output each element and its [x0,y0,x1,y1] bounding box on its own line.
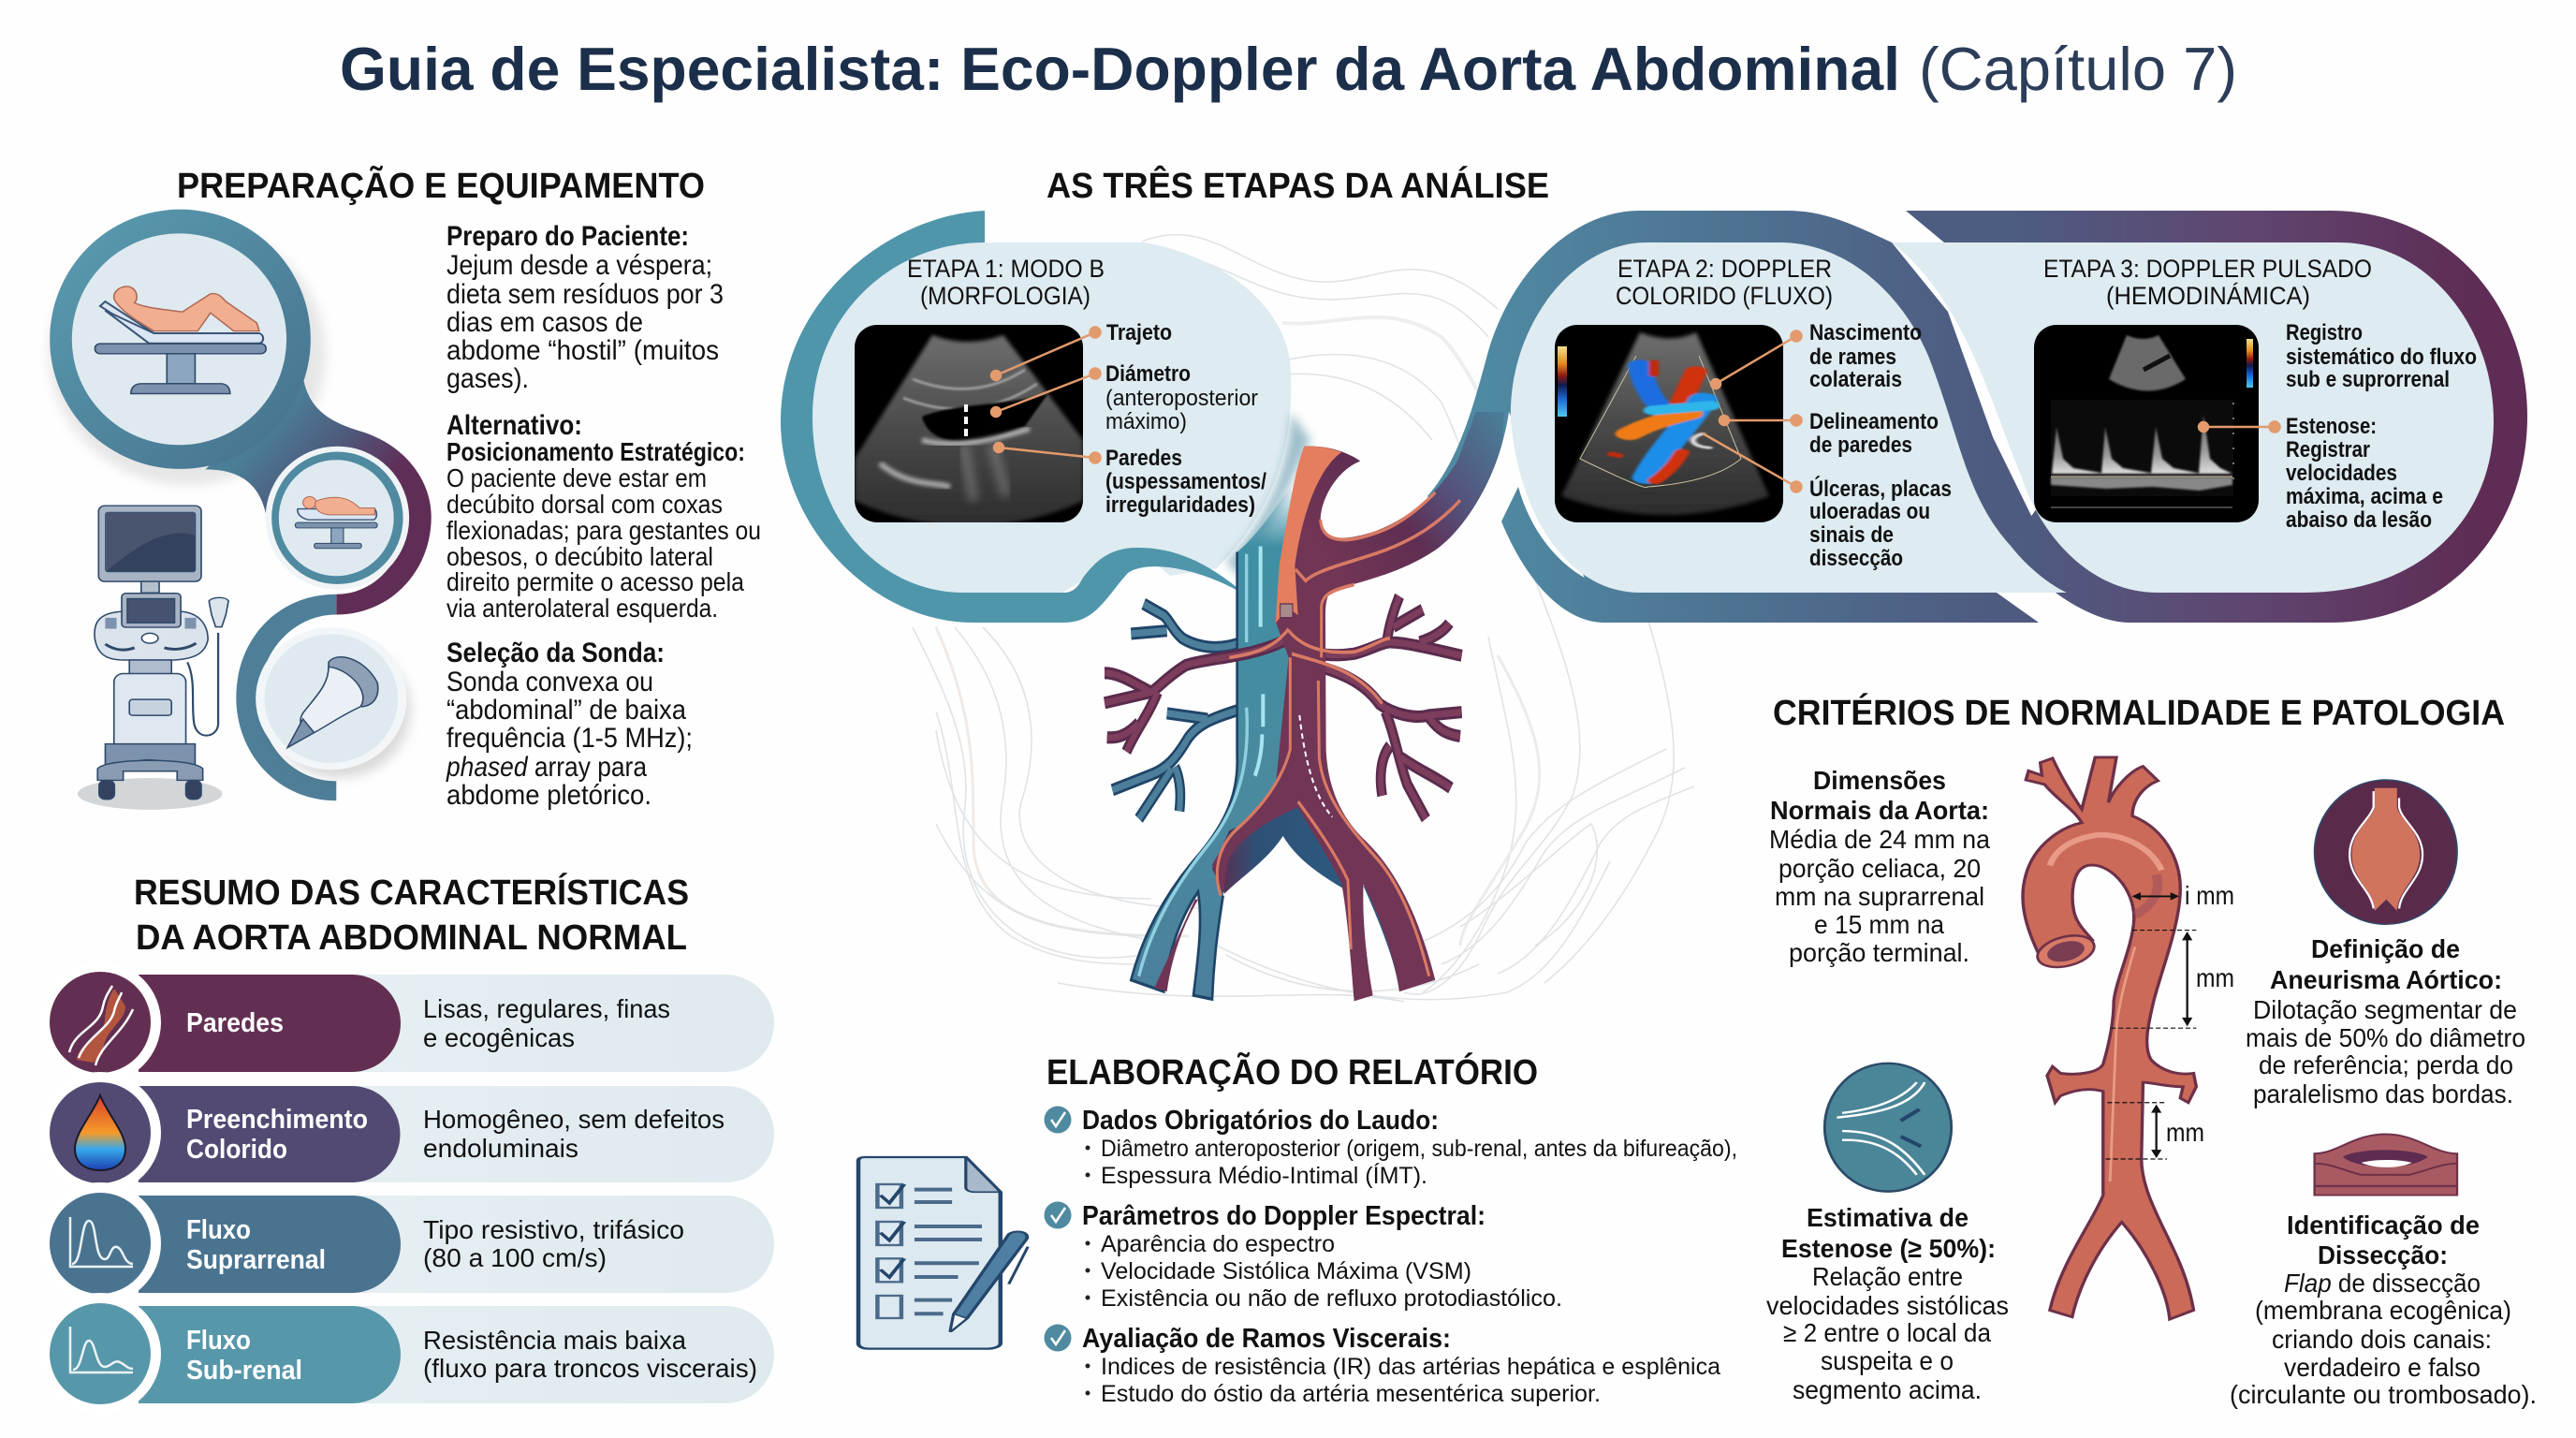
text: estimativa de estenose: suspeita e o [1821,1346,1954,1375]
group: ramos viscerais [1045,1324,1720,1407]
text: dimensões normais: porção terminal. [1789,938,1969,967]
group: parâmetros do doppler: Existência ou não de refluxo protodiastólico. [1101,1285,1562,1312]
icon: patient lateral decubitus [295,496,377,549]
labels: etapa 2 [1809,320,1952,571]
row: paredes [39,961,774,1083]
labels: etapa 2: Nascimento [1809,320,1922,345]
measurement markers [2106,893,2196,1159]
text: identificação de dissecção: verdadeiro e falso [2284,1353,2481,1382]
icon: triphasic waveform [70,1217,133,1267]
text: posicionamento alternativo: decúbito dorsal com coxas [446,490,723,519]
labels: etapa 3: sistemático do fluxo [2286,345,2477,370]
labels: etapa 1 [1105,320,1266,518]
labels: etapa 1: (anteroposterior [1105,386,1258,411]
labels: etapa 2: colaterais [1809,367,1902,392]
heading: resumo: RESUMO DAS CARACTERÍSTICAS [134,872,689,913]
text: dimensões normais: Normais da Aorta: [1770,796,1989,825]
panel: critérios de normalidade e patologia [1766,692,2537,1409]
labels: etapa 2: dissecção [1809,546,1903,571]
row: preenchimento colorido: Colorido [186,1135,287,1165]
text: posicionamento alternativo: obesos, o decúbito lateral [446,542,713,571]
text: identificação de dissecção: (circulante ou trombosado). [2230,1380,2537,1409]
text: posicionamento alternativo: via anterolateral esquerda. [446,594,718,623]
labels: etapa 3 [2286,320,2477,533]
labels: etapa 1: irregularidades) [1105,492,1255,518]
icon: checklist and pen [858,1157,1028,1349]
ultrasound image: colour Doppler [1555,325,1783,522]
heading: etapa 2: ETAPA 2: DOPPLER [1617,255,1832,283]
labels: etapa 1: Paredes [1105,446,1182,471]
icon: dissection flap [2315,1134,2457,1196]
icon: patient on table, legs flexed [95,286,266,393]
title: Guia de Especialista: Eco-Doppler da Aorta Abdominal [340,35,1900,103]
callouts: etapa 2 [1703,331,1801,492]
group: dados obrigatórios: Diâmetro anteroposterior (origem, sub-renal, antes da bifureação), [1101,1136,1737,1162]
icon: ultrasound machine [78,506,228,810]
labels: etapa 3: abaiso da lesão [2286,507,2432,533]
text: definição de aneurisma: Definição de [2311,934,2460,963]
labels: measurements: mm [2166,1118,2204,1147]
text: definição de aneurisma [2246,934,2525,1108]
labels: etapa 2: de rames [1809,345,1896,370]
decorative flowing background lines [913,235,1694,1002]
panel: preparação e equipamento [49,165,761,811]
row: fluxo sub-renal: Sub-renal [186,1356,302,1386]
labels: etapa 2: de paredes [1809,433,1912,458]
row: preenchimento colorido: endoluminais [423,1134,578,1163]
labels: etapa 3: Estenose: [2286,414,2377,439]
row: fluxo suprarrenal: (80 a 100 cm/s) [423,1243,607,1272]
text: estimativa de estenose: Estimativa de [1807,1203,1969,1232]
row: fluxo suprarrenal: Fluxo [186,1215,251,1245]
text: seleção da sonda [446,638,693,811]
row: preenchimento colorido [39,1072,774,1194]
labels: measurements: mm [2196,963,2234,992]
text: preparo do paciente: dias em casos de [446,307,643,338]
row: preenchimento colorido: Preenchimento [186,1105,368,1135]
heading: etapa 1: ETAPA 1: MODO B [907,255,1105,283]
text: posicionamento alternativo [446,410,761,623]
group: parâmetros do doppler: Parâmetros do Doppler Espectral: [1082,1201,1486,1231]
icon: low resistance waveform [70,1327,133,1372]
text: dimensões normais [1769,766,1990,967]
row: preenchimento colorido: Homogêneo, sem defeitos [423,1105,724,1134]
heading: resumo: DA AORTA ABDOMINAL NORMAL [136,918,687,958]
aorta trunk and arm joining etapa 2 band [1212,412,1504,1001]
row: fluxo sub-renal: Fluxo [186,1326,251,1356]
heading: elaboração: ELABORAÇÃO DO RELATÓRIO [1046,1051,1538,1093]
labels: etapa 2: uloeradas ou [1809,499,1930,524]
labels: measurements [2166,881,2234,1147]
row: fluxo suprarrenal [39,1182,774,1304]
text: identificação de dissecção [2230,1211,2537,1409]
iliac crotch fill [1212,801,1354,894]
text: seleção da sonda: Seleção da Sonda: [446,638,665,668]
heading: etapa 1 [907,255,1105,310]
row: fluxo sub-renal: Resistência mais baixa [423,1326,686,1355]
heading: etapa 2: COLORIDO (FLUXO) [1616,282,1833,310]
text: definição de aneurisma: paralelismo das bordas. [2253,1079,2513,1108]
text: posicionamento alternativo: O paciente deve estar em [446,463,707,492]
text: preparo do paciente: Jejum desde a véspera; [446,250,712,281]
icon: vessel walls [69,986,133,1065]
text: identificação de dissecção: criando dois canais: [2272,1325,2492,1354]
text: dimensões normais: porção celiaca, 20 [1778,854,1981,883]
text: preparo do paciente [446,221,724,394]
icon: stenosis [1824,1064,1952,1192]
text: estimativa de estenose: velocidades sistólicas [1766,1291,2009,1320]
text: seleção da sonda: phased array para [446,752,647,783]
text: identificação de dissecção: Dissecção: [2318,1240,2448,1269]
row: paredes: Lisas, regulares, finas [423,994,670,1023]
text: dimensões normais: Média de 24 mm na [1769,825,1990,854]
central illustration: abdominal aorta and vena cava [1105,412,1504,1001]
text: posicionamento alternativo: direito permite o acesso pela [446,567,744,596]
text: posicionamento alternativo: flexionadas; para gestantes ou [446,516,761,545]
text: estimativa de estenose [1766,1203,2009,1404]
heading: as três etapas: AS TRÊS ETAPAS DA ANÁLISE [1046,165,1549,206]
labels: etapa 1: máximo) [1105,409,1187,434]
row: fluxo suprarrenal: Tipo resistivo, trifásico [423,1215,684,1244]
text: posicionamento alternativo: Alternativo: [446,410,582,441]
text: estimativa de estenose: segmento acima. [1793,1375,1982,1404]
icon: aneurysm [2315,780,2457,924]
aorta diagram with measurements [2023,757,2196,1319]
panel: elaboração do relatório [858,1051,1737,1407]
labels: etapa 1: Diámetro [1105,361,1191,387]
group: dados obrigatórios: Espessura Médio-Intimal (ÍMT). [1101,1162,1427,1189]
ultrasound image: pulsed Doppler spectrum [2034,325,2259,522]
group: parâmetros do doppler: Velocidade Sistólica Máxima (VSM) [1101,1258,1471,1284]
text: identificação de dissecção: Flap de dissecção [2284,1269,2481,1298]
text: estimativa de estenose: Relação entre [1812,1262,1963,1291]
panel: resumo das características [39,872,774,1415]
heading: etapa 2 [1616,255,1833,310]
labels: etapa 2: Úlceras, placas [1809,476,1952,502]
text: definição de aneurisma: de referência; perda do [2259,1050,2513,1079]
labels: etapa 3: máxima, acima e [2286,484,2443,509]
row: fluxo sub-renal: (fluxo para troncos viscerais) [423,1354,757,1383]
artery branches [1105,596,1462,819]
heading: etapa 3: ETAPA 3: DOPPLER PULSADO [2043,255,2372,283]
labels: etapa 3: sub e suprorrenal [2286,367,2450,392]
text: preparo do paciente: Preparo do Paciente: [446,221,689,252]
heading: resumo [134,872,689,958]
panel: etapa 1 modo B [781,211,1310,623]
icon: colour drop [75,1095,125,1170]
heading: critérios: CRITÉRIOS DE NORMALIDADE E PATOLOGIA [1773,692,2505,733]
text: posicionamento alternativo: Posicionamento Estratégico: [446,437,745,466]
text: seleção da sonda: frequência (1-5 MHz); [446,723,693,754]
text: dimensões normais: mm na suprarrenal [1775,882,1984,911]
row: fluxo sub-renal [39,1293,774,1415]
labels: etapa 2: sinais de [1809,522,1894,548]
panel: etapa 2 e etapa 3 bands [1427,211,2527,623]
connected circles graphic [49,210,432,810]
row: paredes: e ecogênicas [423,1023,575,1052]
row: paredes: Paredes [186,1008,284,1038]
text: identificação de dissecção: Identificação de [2287,1211,2480,1240]
vein branches [1112,604,1245,819]
panel: etapa 3 doppler pulsado [2034,255,2477,533]
group: dados obrigatórios: Dados Obrigatórios do Laudo: [1082,1106,1439,1136]
labels: etapa 3: Registro [2286,320,2363,345]
text: dimensões normais: Dimensões [1813,766,1946,795]
text: dimensões normais: e 15 mm na [1814,910,1944,939]
icon: convex probe [287,657,378,748]
labels: measurements: i mm [2185,881,2234,910]
row: fluxo suprarrenal: Suprarrenal [186,1245,326,1275]
heading: etapa 3 [2043,255,2372,310]
text: identificação de dissecção: (membrana ecogênica) [2255,1296,2511,1325]
text: definição de aneurisma: mais de 50% do diâmetro [2246,1023,2525,1052]
group: parâmetros do doppler [1045,1201,1562,1312]
callout: etapa 3 [2199,421,2280,433]
heading: etapa 3: (HEMODINÁMICA) [2106,282,2310,310]
vena cava trunk [1131,485,1292,999]
labels: etapa 1: Trajeto [1106,320,1172,345]
text: definição de aneurisma: Dilotação segmentar de [2253,995,2517,1024]
heading: preparação e equipamento: PREPARAÇÃO E EQUIPAMENTO [177,165,705,206]
labels: etapa 2: Delineamento [1809,409,1939,434]
callouts: etapa 1 [991,328,1101,462]
text: preparo do paciente: abdome “hostil” (muitos [446,335,719,366]
group: dados obrigatórios [1045,1106,1737,1189]
labels: etapa 3: Registrar [2286,437,2370,462]
text: estimativa de estenose: ≥ 2 entre o local da [1783,1318,1991,1347]
group: ramos viscerais: Estudo do óstio da artéria mesentérica superior. [1101,1381,1601,1407]
labels: etapa 1: (uspessamentos/ [1105,469,1266,494]
labels: etapa 3: velocidades [2286,461,2397,486]
ultrasound image: B-mode [855,325,1083,526]
text: seleção da sonda: Sonda convexa ou [446,667,653,697]
group: parâmetros do doppler: Aparência do espectro [1101,1231,1335,1257]
text: estimativa de estenose: Estenose (≥ 50%): [1781,1234,1996,1263]
text: preparo do paciente: gases). [446,363,529,394]
group: ramos viscerais: Ayaliação de Ramos Viscerais: [1082,1324,1451,1354]
title: (Capítulo 7) [1919,35,2237,103]
text: definição de aneurisma: Aneurisma Aórtico: [2270,965,2502,994]
panel: etapa 2 doppler colorido [1555,255,1952,571]
text: seleção da sonda: abdome pletórico. [446,780,651,811]
group: ramos viscerais: Indices de resistência (IR) das artérias hepática e esplênica [1101,1354,1720,1380]
heading: etapa 1: (MORFOLOGIA) [920,282,1090,310]
text: seleção da sonda: “abdominal” de baixa [446,695,686,726]
text: preparo do paciente: dieta sem resíduos por 3 [446,279,724,310]
